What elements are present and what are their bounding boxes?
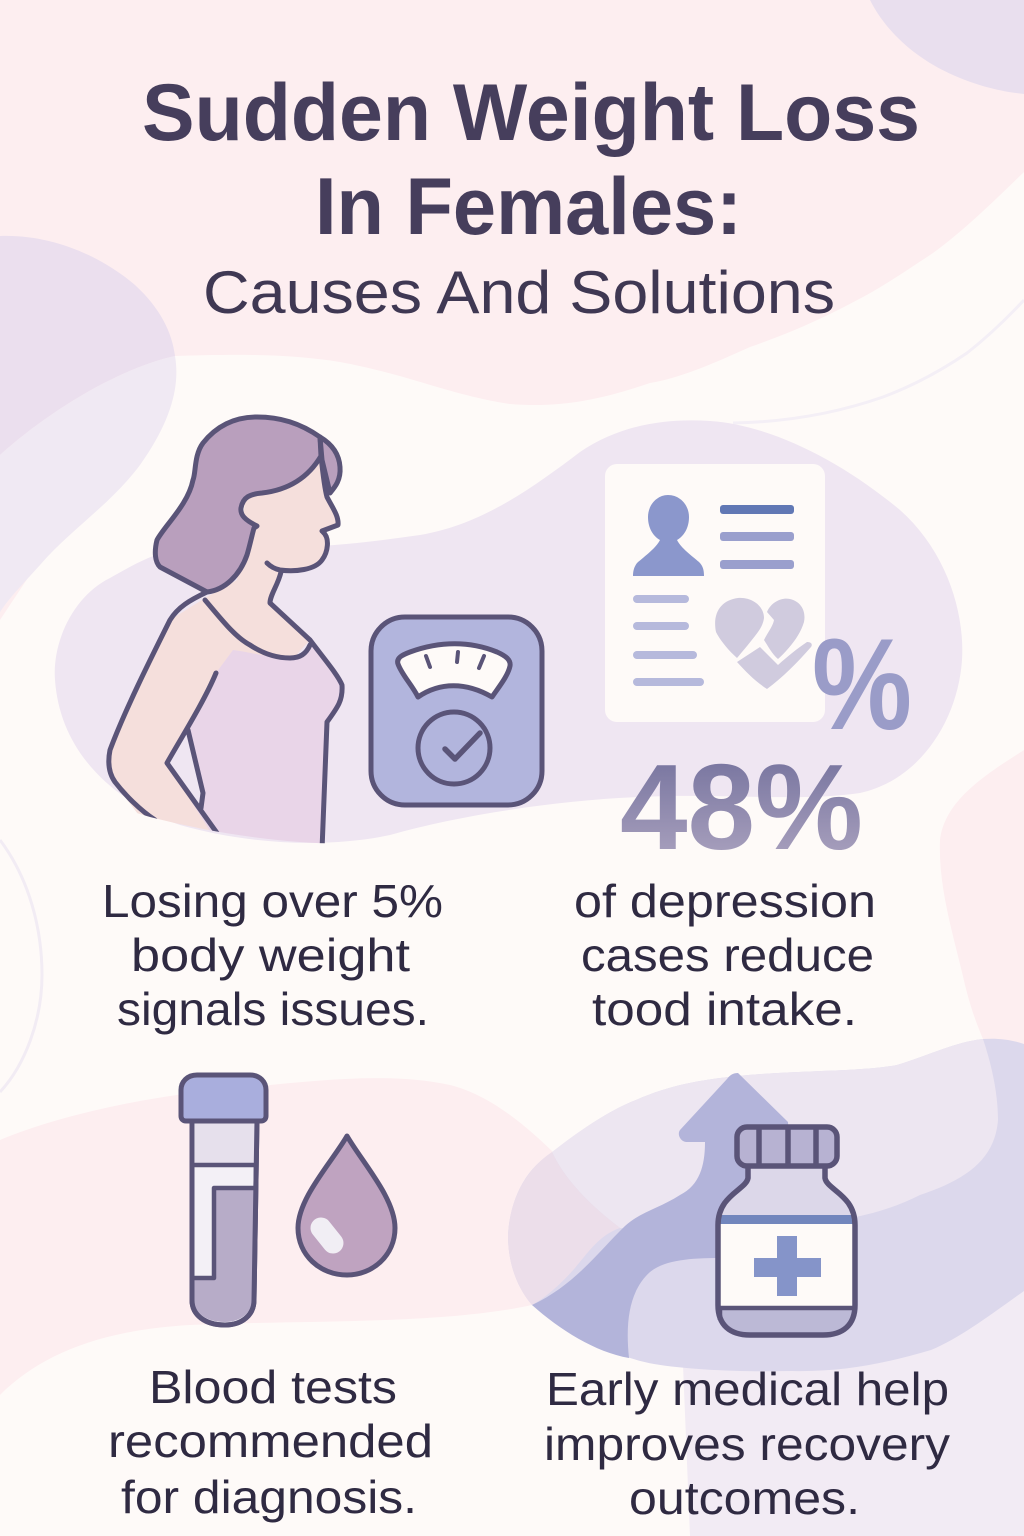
icon: person silhouette xyxy=(633,495,704,576)
icon: rising arrow xyxy=(532,1073,790,1358)
text: early medical help: improves recovery xyxy=(544,1418,950,1470)
title: Sudden Weight Loss xyxy=(142,68,920,158)
text: early medical help: Early medical help xyxy=(546,1363,949,1415)
icon: broken heart xyxy=(715,598,812,689)
text: depression: tood intake. xyxy=(592,983,857,1035)
statistic: 48%: 48% xyxy=(620,739,863,875)
title xyxy=(142,68,920,252)
text: early medical help xyxy=(544,1363,950,1524)
title: In Females: xyxy=(315,162,742,252)
text: losing weight: body weight xyxy=(131,929,410,981)
text: blood tests: recommended xyxy=(108,1415,433,1467)
percent symbol: % xyxy=(812,611,912,757)
text: depression: of depression xyxy=(574,875,876,927)
text: depression xyxy=(574,875,876,1035)
text: depression: cases reduce xyxy=(581,929,874,981)
icon: medicine bottle xyxy=(718,1127,855,1335)
record lines xyxy=(633,505,794,686)
text: losing weight: Losing over 5% xyxy=(102,875,443,927)
icon: scale with check xyxy=(371,617,542,805)
icon: test tube xyxy=(181,1075,266,1325)
text: blood tests xyxy=(108,1361,433,1523)
text: losing weight: signals issues. xyxy=(117,983,429,1035)
illustration: woman in profile xyxy=(109,417,342,850)
text: losing weight xyxy=(102,875,443,1035)
icon: blood drop xyxy=(298,1136,395,1275)
text: early medical help: outcomes. xyxy=(629,1472,860,1524)
text: blood tests: Blood tests xyxy=(149,1361,397,1413)
subtitle: Causes And Solutions xyxy=(203,259,835,326)
icon: medical record card xyxy=(605,464,825,722)
text: blood tests: for diagnosis. xyxy=(121,1471,417,1523)
